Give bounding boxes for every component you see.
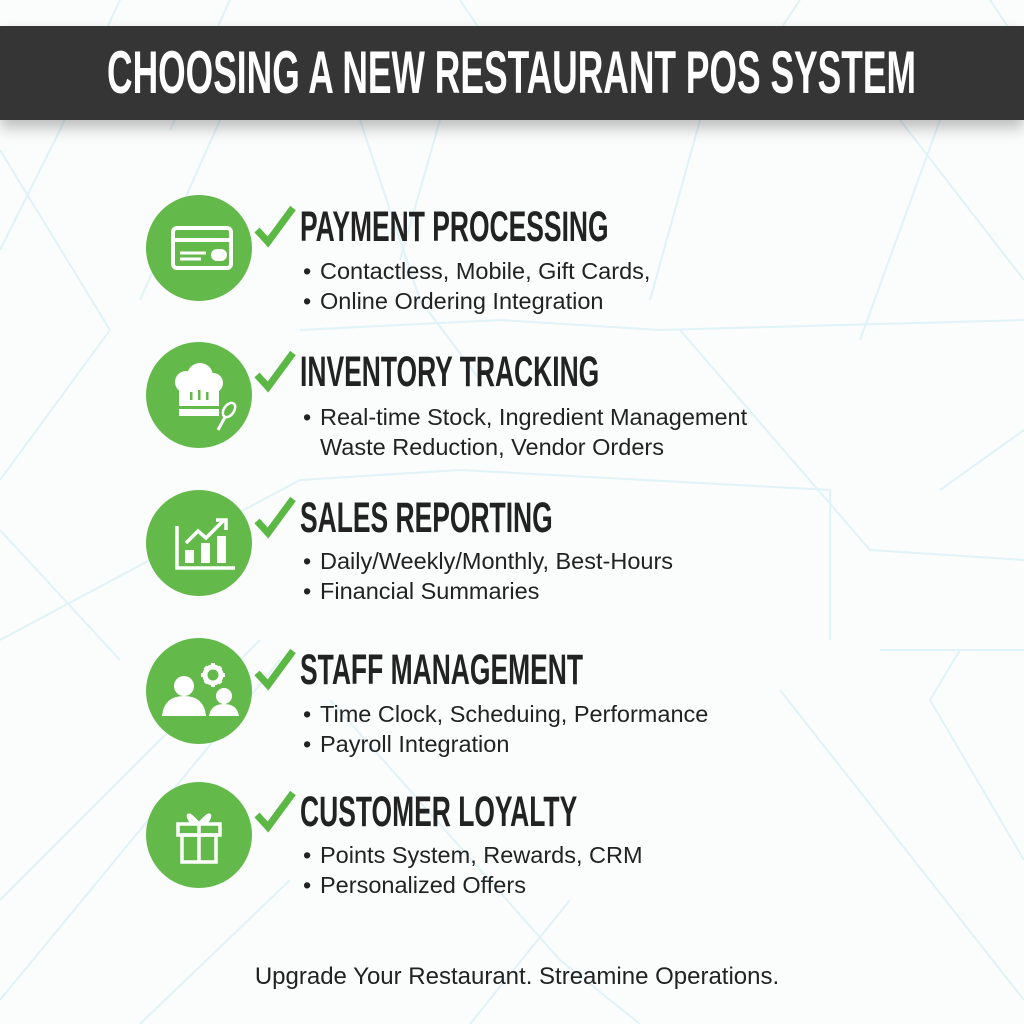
bullets: • xyxy=(303,578,311,604)
icon: credit card xyxy=(146,195,252,301)
title bar xyxy=(0,26,1024,120)
bullets: • xyxy=(303,872,311,898)
bullets: • xyxy=(303,404,311,430)
bullets: Contactless, Mobile, Gift Cards, xyxy=(320,258,650,284)
bullets: • xyxy=(303,701,311,727)
icon: checkmark xyxy=(254,496,296,538)
title: CHOOSING A NEW RESTAURANT POS SYSTEM xyxy=(107,39,916,106)
bullets: Financial Summaries xyxy=(320,578,539,604)
heading: STAFF MANAGEMENT xyxy=(300,646,583,694)
heading: INVENTORY TRACKING xyxy=(300,348,599,396)
bullets: • xyxy=(303,258,311,284)
heading: CUSTOMER LOYALTY xyxy=(300,788,577,836)
bullets: • xyxy=(303,288,311,314)
bullets: Points System, Rewards, CRM xyxy=(320,842,643,868)
bullets: Payroll Integration xyxy=(320,731,509,757)
bullets xyxy=(303,258,650,314)
bullets: Waste Reduction, Vendor Orders xyxy=(320,434,664,460)
icon: bar chart xyxy=(146,490,252,596)
bullets: • xyxy=(303,548,311,574)
bullets: Online Ordering Integration xyxy=(320,288,603,314)
bullets: Personalized Offers xyxy=(320,872,526,898)
bullets: • xyxy=(303,731,311,757)
icon: chef hat and whisk xyxy=(146,342,252,448)
heading: SALES REPORTING xyxy=(300,494,553,542)
bullets: Real-time Stock, Ingredient Management xyxy=(320,404,747,430)
panel: inventory tracking xyxy=(146,342,747,460)
panel: sales reporting xyxy=(146,490,673,604)
footer tagline: Upgrade Your Restaurant. Streamine Operations. xyxy=(255,963,779,990)
bullets: Time Clock, Scheduing, Performance xyxy=(320,701,708,727)
bullets xyxy=(303,548,673,604)
icon: gift xyxy=(146,782,252,888)
icon: checkmark xyxy=(254,648,296,690)
icon: checkmark xyxy=(254,350,296,392)
bullets xyxy=(303,842,643,898)
panel: customer loyalty xyxy=(146,782,643,898)
heading: PAYMENT PROCESSING xyxy=(300,203,609,251)
bullets: • xyxy=(303,842,311,868)
bullets xyxy=(303,701,708,757)
bullets xyxy=(303,404,747,460)
icon: checkmark xyxy=(254,206,296,248)
panel: payment processing xyxy=(146,195,650,314)
bullets: Daily/Weekly/Monthly, Best-Hours xyxy=(320,548,673,574)
icon: people with gear xyxy=(146,638,252,744)
panel: staff management xyxy=(146,638,708,757)
icon: checkmark xyxy=(254,790,296,832)
